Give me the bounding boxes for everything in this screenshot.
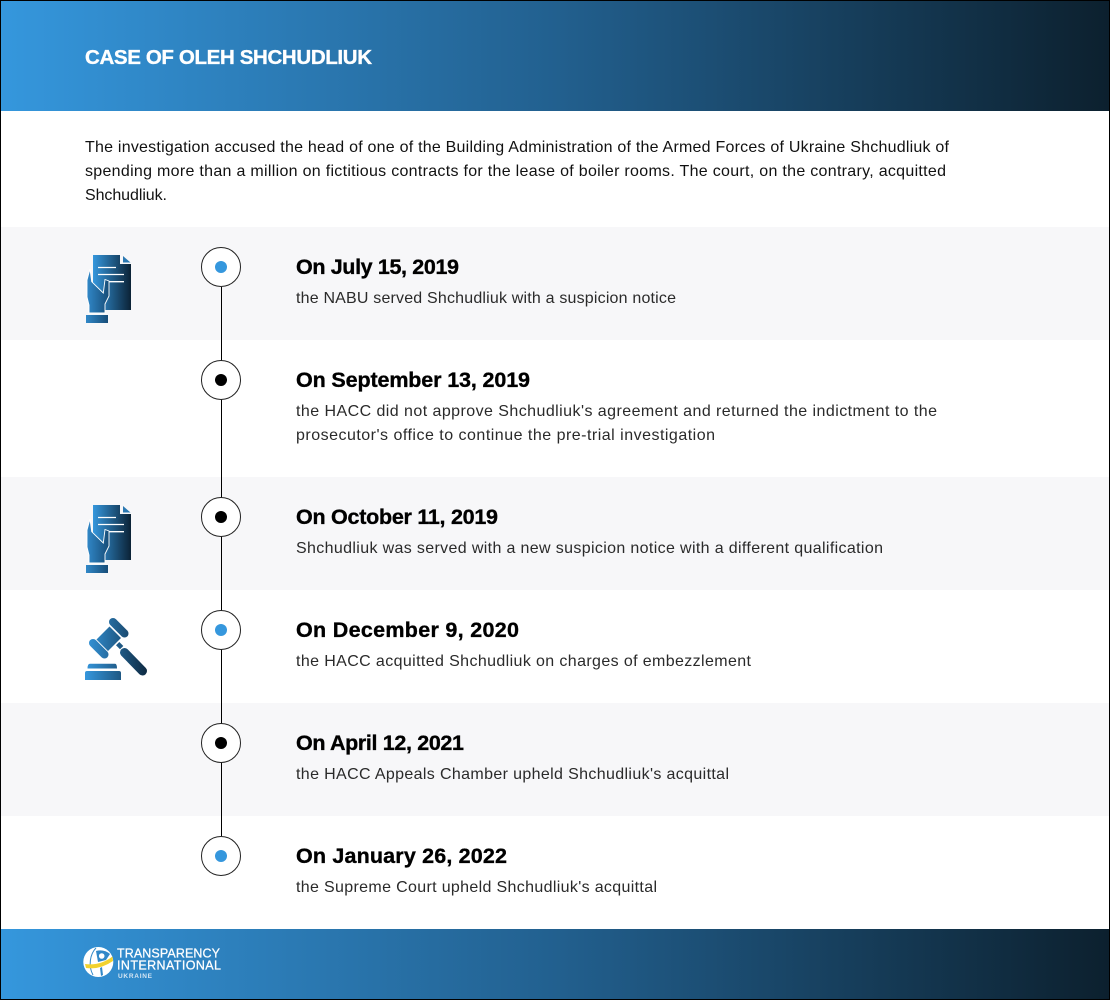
timeline marker: October 11, 2019 — [202, 498, 240, 536]
icon: document in hand, July 2019 — [86, 255, 131, 323]
title: CASE OF OLEH SHCHUDLIUK — [85, 46, 372, 69]
logo: Transparency International Ukraine — [83, 946, 221, 980]
entry: January 26, 2022: the Supreme Court upheld Shchudliuk's acquittal — [296, 879, 657, 896]
timeline marker: April 12, 2021 — [202, 724, 240, 762]
timeline line — [221, 287, 222, 836]
timeline marker: December 9, 2020 — [202, 610, 240, 650]
intro text: Shchudliuk. — [85, 187, 167, 204]
icon: document in hand, October 2019 — [86, 505, 131, 573]
entry: December 9, 2020 — [296, 618, 752, 670]
entry: October 11, 2019: On October 11, 2019 — [296, 505, 498, 529]
intro text: spending more than a million on fictitious contracts for the lease of boiler rooms. The court, on the contrary, acquitted — [85, 163, 946, 180]
timeline marker: January 26, 2022 — [202, 836, 240, 876]
entry: September 13, 2019: prosecutor's office to continue the pre-trial investigation — [296, 427, 715, 444]
entry: January 26, 2022: On January 26, 2022 — [296, 844, 507, 868]
entry: December 9, 2020: the HACC acquitted Shchudliuk on charges of embezzlement — [296, 653, 752, 670]
logo: Transparency International Ukraine: UKRAINE — [118, 973, 153, 980]
logo: Transparency International Ukraine: TRANSPARENCY — [117, 946, 221, 960]
entry: April 12, 2021 — [296, 731, 729, 783]
row background: April 2021 — [0, 703, 1110, 816]
row background: October 2019 — [0, 477, 1110, 590]
entry: September 13, 2019: the HACC did not approve Shchudliuk's agreement and returned the indictment to the — [296, 403, 937, 420]
logo: Transparency International Ukraine: INTERNATIONAL — [117, 958, 221, 972]
entry: July 15, 2019: the NABU served Shchudliuk with a suspicion notice — [296, 290, 676, 307]
footer band — [0, 929, 1110, 1000]
entry: July 15, 2019: On July 15, 2019 — [296, 255, 459, 279]
intro text: The investigation accused the head of one of the Building Administration of the Armed Forces of Ukraine Shchudliuk of — [85, 139, 950, 156]
entry: April 12, 2021: On April 12, 2021 — [296, 731, 464, 755]
timeline marker: September 13, 2019 — [202, 360, 240, 400]
entry: April 12, 2021: the HACC Appeals Chamber upheld Shchudliuk's acquittal — [296, 766, 729, 783]
entry: September 13, 2019 — [296, 368, 937, 444]
icon: gavel — [85, 622, 142, 680]
entry: December 9, 2020: On December 9, 2020 — [296, 618, 519, 642]
entry: September 13, 2019: On September 13, 2019 — [296, 368, 530, 392]
header band — [0, 0, 1110, 111]
timeline marker: July 15, 2019 — [202, 248, 240, 286]
intro text — [85, 139, 950, 204]
entry: July 15, 2019 — [296, 255, 676, 307]
entry: January 26, 2022 — [296, 844, 657, 896]
entry: October 11, 2019 — [296, 505, 883, 557]
row background: July 2019 — [0, 227, 1110, 340]
entry: October 11, 2019: Shchudliuk was served with a new suspicion notice with a different qualification — [296, 540, 883, 557]
